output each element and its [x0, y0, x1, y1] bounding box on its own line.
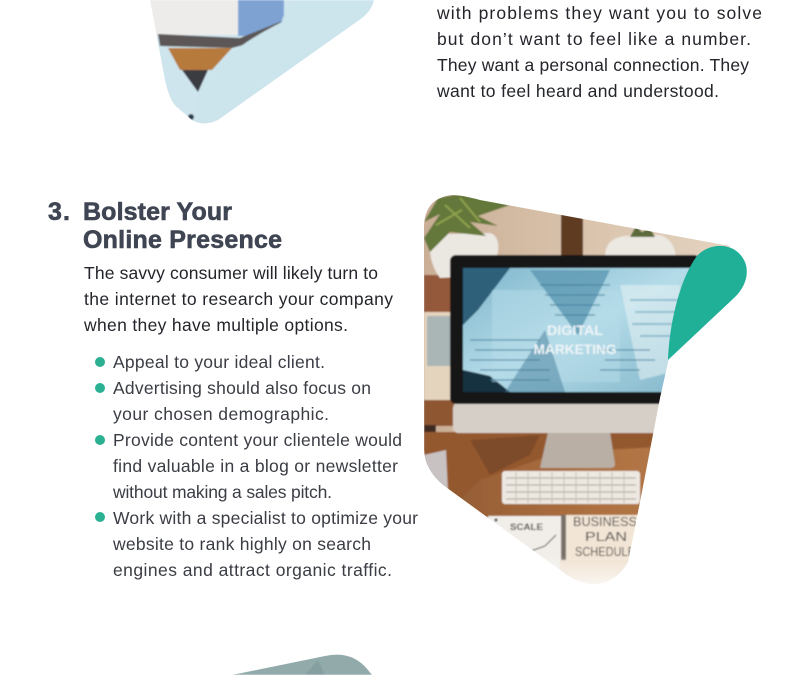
bullet list: online presence tips: website to rank highly on search [112, 534, 371, 554]
bullet list: online presence tips: Appeal to your ideal client. [113, 352, 325, 372]
photo: bottom next section (cropped) [232, 654, 372, 675]
text block: section description: when they have multiple options. [83, 315, 348, 335]
text block: intro paragraph continued: with problems they want you to solve [436, 3, 762, 23]
text block: intro paragraph continued: want to feel heard and understood. [436, 81, 719, 101]
photo: desktop computer showing digital marketing: PLAN [585, 529, 627, 544]
photo: desktop computer showing digital marketing: BUSINESS [573, 514, 637, 529]
text block: section description [83, 263, 393, 335]
text block: section description: The savvy consumer will likely turn to [84, 263, 378, 283]
photo: desktop computer showing digital marketing [424, 195, 730, 584]
bullet list: online presence tips: Provide content your clientele would [113, 430, 402, 450]
bullet list: online presence tips: without making a sales pitch. [112, 482, 332, 502]
heading: 3. Bolster Your Online Presence: Bolster Your [83, 198, 232, 226]
icon: teal accent blob [668, 246, 747, 360]
bullet list: online presence tips: your chosen demographic. [113, 404, 329, 424]
photo: desktop computer showing digital marketing: SCALE [510, 522, 543, 532]
heading: 3. Bolster Your Online Presence: Online Presence [83, 226, 282, 254]
heading: 3. Bolster Your Online Presence [48, 198, 282, 254]
photo: desktop computer showing digital marketing: SCHEDULE [575, 544, 635, 559]
text block: section description: the internet to research your company [84, 289, 393, 309]
bullet list: online presence tips: Advertising should also focus on [113, 378, 371, 398]
heading: 3. Bolster Your Online Presence: 3. [48, 198, 70, 226]
bullet list: online presence tips: engines and attract organic traffic. [113, 560, 392, 580]
screen caption: DIGITAL [547, 322, 603, 338]
bullet list: online presence tips: Work with a specialist to optimize your [113, 508, 418, 528]
computer stand [540, 432, 615, 468]
text block: intro paragraph continued: They want a personal connection. They [437, 55, 749, 75]
bullet list: online presence tips: find valuable in a blog or newsletter [113, 456, 398, 476]
bullet list: online presence tips [95, 352, 418, 580]
photo: top left, person with laptop (cropped) [145, 0, 380, 130]
photo: desktop computer showing digital marketing: MARKETING [534, 341, 617, 357]
text block: intro paragraph continued [436, 3, 762, 101]
text block: intro paragraph continued: but don’t want to feel like a number. [437, 29, 751, 49]
